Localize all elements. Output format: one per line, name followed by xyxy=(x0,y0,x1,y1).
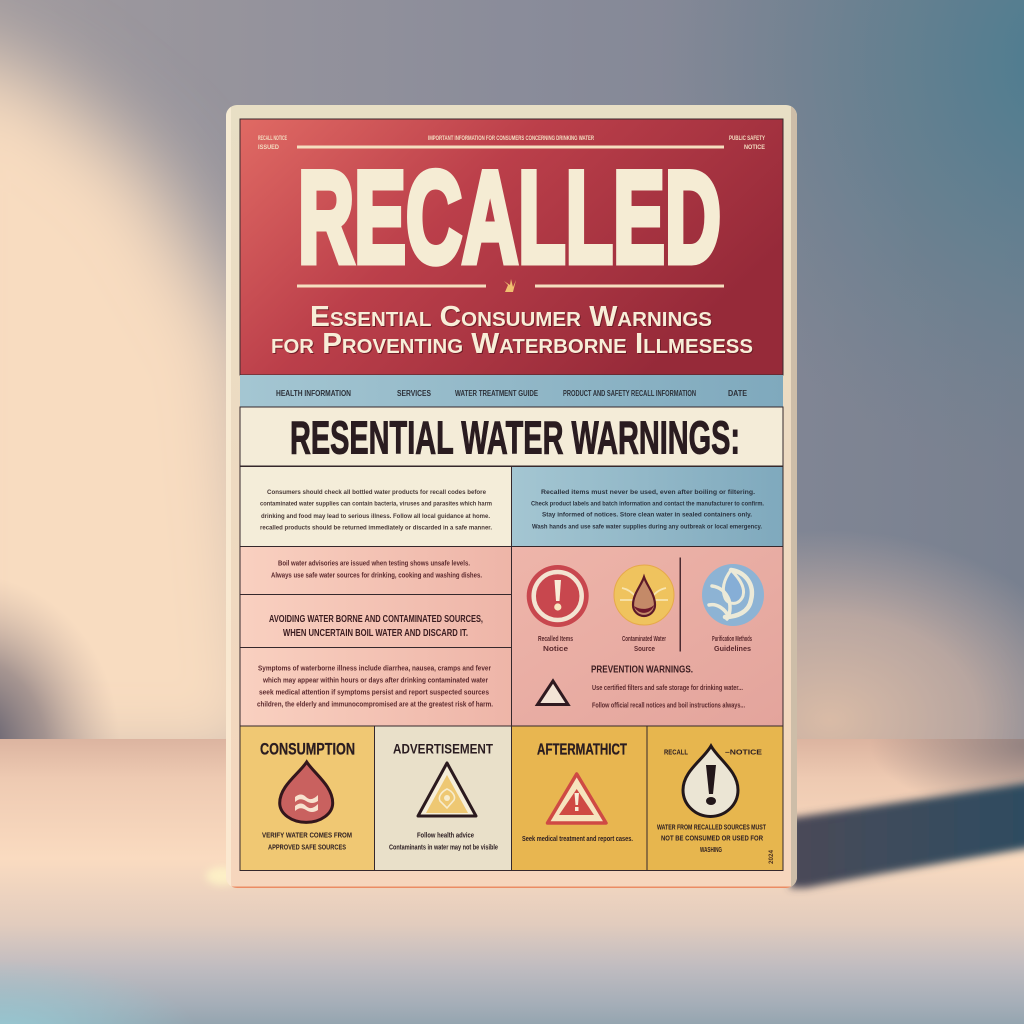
panel: blue text block: Stay informed of notices. Store clean water in sealed containers only. xyxy=(542,512,752,518)
panel: blue strip: SERVICES xyxy=(397,389,432,398)
small vertical note: 2024 xyxy=(769,849,775,864)
panel: blue strip xyxy=(240,375,783,407)
panel: alert: WASHING xyxy=(700,845,722,854)
subtitle: Essential Consuumer Warnings xyxy=(310,301,712,333)
panel: section heading: RESENTIAL WATER WARNINGS: xyxy=(290,412,740,464)
panel: cream text block xyxy=(240,466,512,546)
panel: blue text block: Wash hands and use safe water supplies during any outbreak or local emergency. xyxy=(532,524,762,530)
subtitle: for Proventing Waterborne Illmesess xyxy=(271,328,753,360)
subtitle xyxy=(271,301,754,361)
panel: blue strip: PRODUCT AND SAFETY RECALL INFORMATION xyxy=(563,389,696,398)
panel: alert: RECALL xyxy=(664,748,688,756)
panel: blue text block: Recalled items must never be used, even after boiling or filtering. xyxy=(541,490,755,496)
icon: outlined triangle xyxy=(538,681,568,704)
prevention lines xyxy=(592,685,745,710)
panel: cream text block: drinking and food may lead to serious illness. Follow all local guidance at home. xyxy=(261,514,490,520)
panel: pink text block one xyxy=(240,546,512,594)
panel: alert xyxy=(647,726,783,870)
prevention lines: Follow official recall notices and boil instructions always... xyxy=(592,702,745,710)
panel: cream text block: recalled products should be returned immediately or discarded in a safe manner. xyxy=(260,526,492,532)
icon: red warning triangle xyxy=(548,774,606,823)
icon labels: Recalled Items xyxy=(538,636,573,643)
panel: consumption: VERIFY WATER COMES FROM xyxy=(262,830,352,840)
icon labels: Source xyxy=(634,646,655,653)
panel: blue text block xyxy=(512,466,783,546)
panel: pink text block two xyxy=(240,594,512,648)
icon labels: Notice xyxy=(543,646,568,653)
panel: aftermath: AFTERMATHICT xyxy=(537,742,627,758)
panel: consumption: APPROVED SAFE SOURCES xyxy=(268,842,346,852)
panel: blue strip: WATER TREATMENT GUIDE xyxy=(455,389,539,398)
panel: consumption: CONSUMPTION xyxy=(260,740,355,758)
poster card xyxy=(226,105,797,888)
icon: cream triangle with drop xyxy=(418,763,476,816)
icon labels: Contaminated Water xyxy=(622,636,666,643)
icon: red drop with waves xyxy=(280,762,333,822)
panel: aftermath xyxy=(512,726,647,870)
panel: consumption xyxy=(240,726,374,870)
vertical divider xyxy=(680,558,681,652)
header fine print: NOTICE xyxy=(744,145,765,151)
header fine print: PUBLIC SAFETY xyxy=(729,136,765,142)
icon: blue circle with water swirl xyxy=(702,564,764,626)
subtitle: for Proventing Waterborne Illmesess xyxy=(272,329,754,361)
panel: cream text block: Consumers should check all bottled water products for recall codes before xyxy=(267,490,487,496)
panel: pink text block three: children, the elderly and immunocompromised are at the greatest risk of harm. xyxy=(257,702,493,708)
header fine print: IMPORTANT INFORMATION FOR CONSUMERS CONCERNING DRINKING WATER xyxy=(428,136,594,142)
panel: section heading xyxy=(240,407,783,466)
panel: blue strip: DATE xyxy=(728,389,748,398)
panel: red header xyxy=(240,119,783,375)
panel: pink text block one: Always use safe water sources for drinking, cooking and washing dishes. xyxy=(271,572,482,580)
icon: small star ornament xyxy=(504,279,516,292)
panel: blue strip: HEALTH INFORMATION xyxy=(276,389,351,398)
icon labels xyxy=(538,636,752,653)
panel: alert: –NOTICE xyxy=(725,748,762,756)
subtitle: Essential Consuumer Warnings xyxy=(311,302,713,334)
panel: blue text block: Check product labels and batch information and contact the manufacturer to confirm. xyxy=(531,502,764,508)
panel: pink text block three: Symptoms of waterborne illness include diarrhea, nausea, cramps and fever xyxy=(258,666,491,672)
prevention heading: PREVENTION WARNINGS. xyxy=(591,664,693,676)
icon: drop with exclamation xyxy=(683,746,738,816)
header fine print xyxy=(258,136,765,151)
panel: advertisement xyxy=(374,726,512,870)
header fine print: ISSUED xyxy=(258,145,280,151)
panel: advertisement: Contaminants in water may not be visible xyxy=(389,844,498,852)
icon labels: Guidelines xyxy=(714,646,751,653)
panel: pink text block three: which may appear within hours or days after drinking contaminated water xyxy=(262,678,488,684)
panel: advertisement: Follow health advice xyxy=(417,832,474,840)
panel: cream text block: contaminated water supplies can contain bacteria, viruses and parasites which harm xyxy=(260,502,492,508)
title: RECALLED xyxy=(298,144,721,290)
panel: alert: NOT BE CONSUMED OR USED FOR xyxy=(661,834,763,842)
panel: icons and prevention xyxy=(512,546,783,726)
panel: pink text block two: WHEN UNCERTAIN BOIL WATER AND DISCARD IT. xyxy=(283,628,468,639)
panel: aftermath: Seek medical treatment and report cases. xyxy=(522,834,633,843)
icon: yellow circle with drop xyxy=(614,565,674,625)
icon: red exclamation circle xyxy=(527,565,589,627)
poster cast shadow xyxy=(790,782,1024,888)
panel: pink text block one: Boil water advisories are issued when testing shows unsafe levels. xyxy=(278,560,470,568)
panel: pink text block three xyxy=(240,648,512,726)
prevention lines: Use certified filters and safe storage for drinking water... xyxy=(592,685,743,692)
panel: pink text block two: AVOIDING WATER BORNE AND CONTAMINATED SOURCES, xyxy=(269,614,483,625)
icon labels: Purification Methods xyxy=(712,636,752,643)
panel: alert: WATER FROM RECALLED SOURCES MUST xyxy=(657,822,766,832)
header fine print: RECALL NOTICE xyxy=(258,136,287,142)
panel: advertisement: ADVERTISEMENT xyxy=(393,742,494,756)
panel: pink text block three: seek medical attention if symptoms persist and report suspected sources xyxy=(259,690,489,696)
